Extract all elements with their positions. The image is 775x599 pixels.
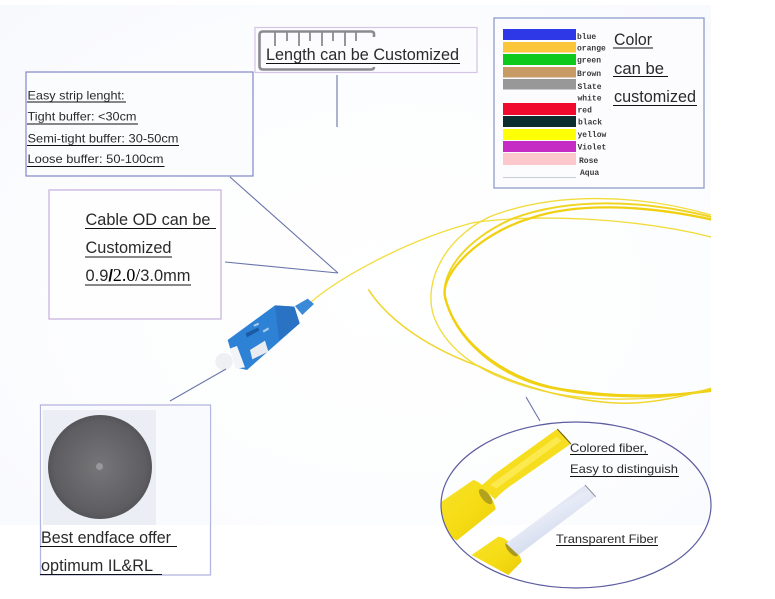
colored fiber (481, 429, 571, 499)
white ferrule (215, 353, 233, 370)
heading: length: Length can be Customized (266, 46, 459, 64)
panel: length callout (255, 28, 477, 72)
heading: color (613, 31, 697, 106)
text: cable OD: Cable OD can be (86, 211, 210, 229)
color labels: blue (577, 33, 596, 42)
text: endface (40, 529, 177, 575)
color labels: red (578, 106, 592, 116)
color labels: Rose (579, 157, 598, 166)
panel: endface (40, 405, 210, 575)
text: colored fiber: Colored fiber, (570, 441, 647, 455)
colored fiber sleeve (437, 480, 496, 541)
text: colored fiber (556, 441, 679, 546)
text: cable OD (85, 211, 216, 285)
image: endface photo (43, 410, 156, 525)
color labels (577, 33, 607, 178)
photo background (0, 5, 711, 525)
leader lines (170, 75, 540, 421)
blue connector body (228, 305, 300, 370)
panel: easy strip length (26, 72, 253, 176)
fiber boot (295, 299, 314, 315)
text: strip lengths: Loose buffer: 50-100cm (28, 152, 164, 166)
SC connector (215, 299, 314, 370)
color labels: yellow (578, 131, 607, 140)
heading: color: can be (614, 60, 664, 78)
text: transparent fiber: Transparent Fiber (556, 532, 658, 546)
panel: fiber close-up (437, 422, 711, 588)
icon: ruler (260, 32, 374, 70)
text: strip lengths: Easy strip lenght: (28, 88, 125, 102)
color labels: Brown (577, 70, 601, 79)
color labels: black (578, 118, 602, 128)
color labels: white (578, 94, 602, 104)
panel: color options (494, 18, 704, 188)
panel: cable OD (49, 190, 221, 319)
color labels: Aqua (580, 169, 599, 178)
color labels: green (577, 56, 601, 66)
text: colored fiber: Easy to distinguish (570, 462, 678, 476)
heading: color: customized (614, 88, 696, 106)
color labels: orange (577, 44, 606, 54)
transparent fiber sleeve (472, 537, 522, 575)
text: cable OD: Customized (86, 239, 172, 257)
text: cable OD: 0.9/2.0/3.0mm (86, 265, 190, 285)
color labels: Violet (578, 144, 607, 152)
text: endface: optimum IL&RL (41, 557, 153, 575)
heading: color: Color (614, 31, 652, 49)
fiber cable loops (311, 199, 717, 403)
color labels: Slate (578, 83, 602, 92)
text: strip lengths: Tight buffer: <30cm (28, 110, 136, 124)
illustration: fibers (437, 429, 596, 575)
transparent fiber (506, 485, 596, 555)
text: endface: Best endface offer (41, 529, 171, 547)
color swatches (503, 29, 576, 178)
text: strip lengths: Semi-tight buffer: 30-50cm (28, 132, 178, 146)
text: strip lengths (27, 88, 179, 166)
